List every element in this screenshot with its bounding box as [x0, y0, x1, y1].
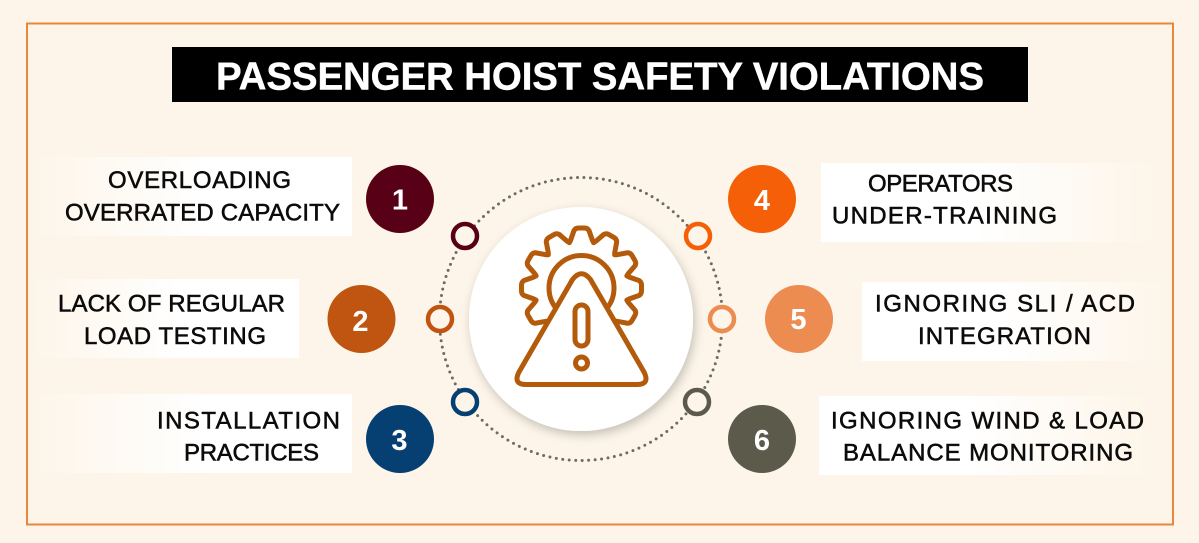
item 6: wind and load: IGNORING WIND & LOAD: [831, 408, 1144, 434]
item 6: wind and load: BALANCE MONITORING: [843, 440, 1133, 466]
small ring 6: [685, 390, 709, 414]
item 6: wind and load: [728, 396, 1151, 475]
item 4: operators: OPERATORS: [868, 170, 1013, 198]
dotted orbit ring: [440, 178, 722, 460]
small ring 3: [453, 390, 477, 414]
item 3: installation: [30, 394, 434, 473]
item 1: overloading: 1: [392, 184, 408, 216]
item 5: SLI ACD: IGNORING SLI / ACD: [875, 290, 1135, 318]
item 3: installation: INSTALLATION: [157, 408, 340, 434]
small ring 5: [710, 307, 734, 331]
small ring 4: [686, 224, 710, 248]
item 2: load testing: [30, 279, 396, 358]
item 4: operators: UNDER-TRAINING: [832, 202, 1057, 230]
item 5: SLI ACD: INTEGRATION: [918, 323, 1091, 350]
item 3: installation: PRACTICES: [184, 440, 319, 466]
item 4: operators: 4: [754, 185, 770, 217]
item 2: load testing: LOAD TESTING: [84, 323, 266, 350]
item 6: wind and load: 6: [754, 425, 770, 457]
item 5: SLI ACD: 5: [790, 304, 807, 336]
icon: gear with warning triangle: [517, 228, 646, 384]
item 2: load testing: LACK OF REGULAR: [58, 290, 285, 318]
item 3: installation: 3: [391, 425, 408, 457]
item 1: overloading: [30, 157, 434, 236]
small ring 1: [453, 224, 477, 248]
item 2: load testing: 2: [352, 306, 369, 338]
small ring 2: [428, 307, 452, 331]
item 1: overloading: OVERRATED CAPACITY: [65, 200, 340, 226]
item 1: overloading: OVERLOADING: [108, 167, 291, 194]
central white circle: [469, 207, 693, 431]
title: PASSENGER HOIST SAFETY VIOLATIONS: [216, 56, 984, 98]
item 4: operators: [728, 163, 1161, 242]
item 5: SLI ACD: [765, 282, 1170, 361]
